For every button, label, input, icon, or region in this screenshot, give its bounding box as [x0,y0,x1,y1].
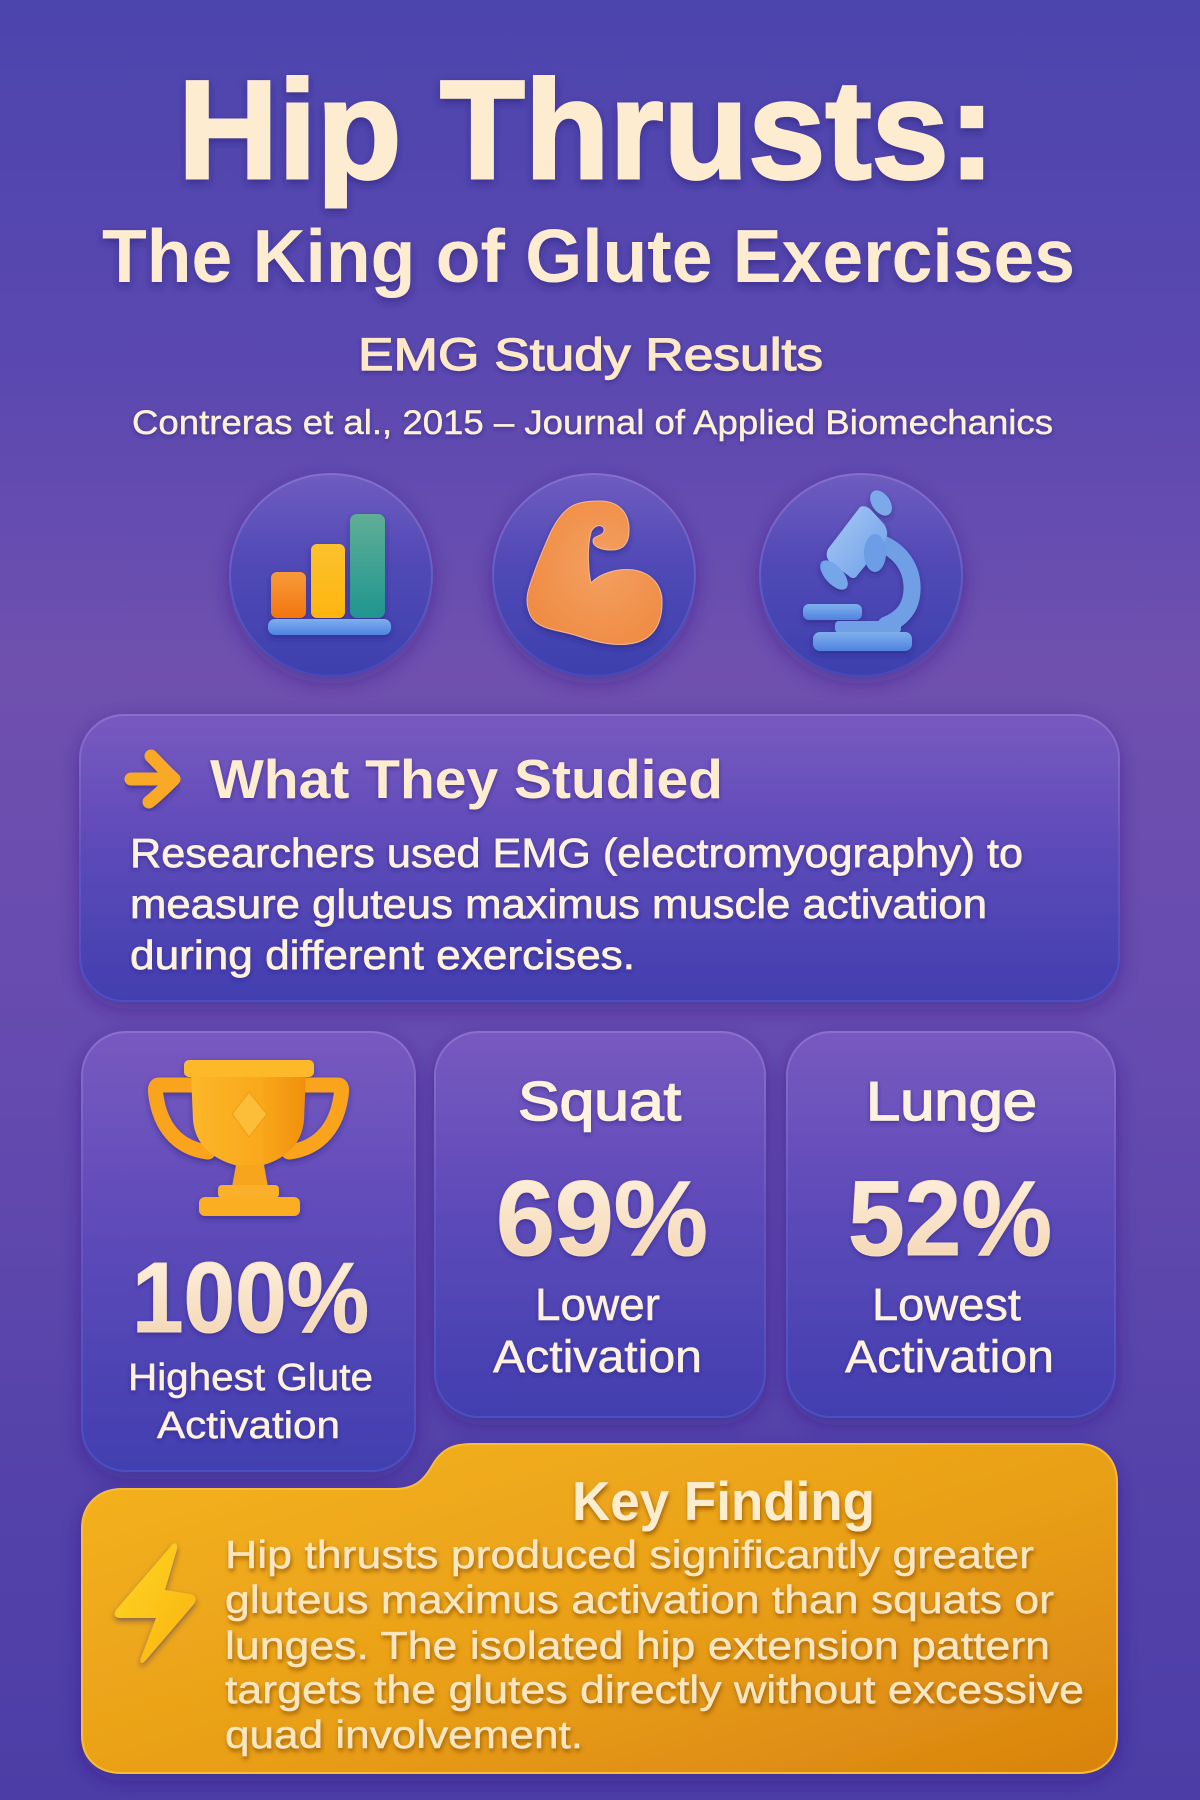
panel: key finding [82,1444,1117,1773]
body text: targets the glutes directly without excessive [225,1669,1084,1712]
body text: lunges. The isolated hip extension pattern [225,1625,1050,1668]
icon: flexed arm [493,474,695,676]
card: hip thrust 100% [82,1032,415,1471]
subtitle: The King of Glute Exercises [102,214,1075,298]
heading: lunge: Lunge [866,1070,1037,1132]
body text: during different exercises. [130,932,635,978]
body text: Hip thrusts produced significantly greater [225,1534,1034,1577]
card: squat 69% [435,1032,765,1417]
panel: what they studied [80,715,1119,1001]
body text: quad involvement. [225,1714,583,1757]
label: lower activation: Lower [535,1279,660,1330]
label: lowest activation [845,1279,1054,1382]
body text [130,830,1023,978]
icon: arrow [131,756,174,802]
stat: 100%: 100% [132,1242,369,1354]
label: lower activation [493,1279,702,1382]
heading: key finding: Key Finding [572,1470,875,1532]
icon: bar chart [230,474,432,676]
label: lowest activation: Lowest [872,1279,1022,1330]
card: lunge 52% [787,1032,1115,1417]
body text: gluteus maximus activation than squats or [225,1579,1054,1622]
label: lowest activation: Activation [845,1331,1054,1382]
stat: 69%: 69% [496,1158,708,1278]
title: Hip Thrusts: [178,51,995,208]
heading: squat: Squat [518,1070,681,1132]
body text [225,1534,1084,1757]
icon: trophy [155,1060,342,1216]
study label: EMG Study Results [358,329,823,380]
stat: 52%: 52% [848,1158,1052,1278]
icon: microscope [760,474,962,676]
citation: Contreras et al., 2015 – Journal of Applied Biomechanics [132,404,1053,442]
heading: what they studied: What They Studied [210,748,723,810]
label: lower activation: Activation [493,1331,702,1382]
body text: measure gluteus maximus muscle activation [130,881,987,927]
label: highest glute activation [128,1357,373,1447]
body text: Researchers used EMG (electromyography) to [130,830,1023,876]
label: highest glute activation: Activation [157,1405,340,1447]
icon: lightning bolt [115,1543,196,1663]
label: highest glute activation: Highest Glute [128,1357,373,1399]
